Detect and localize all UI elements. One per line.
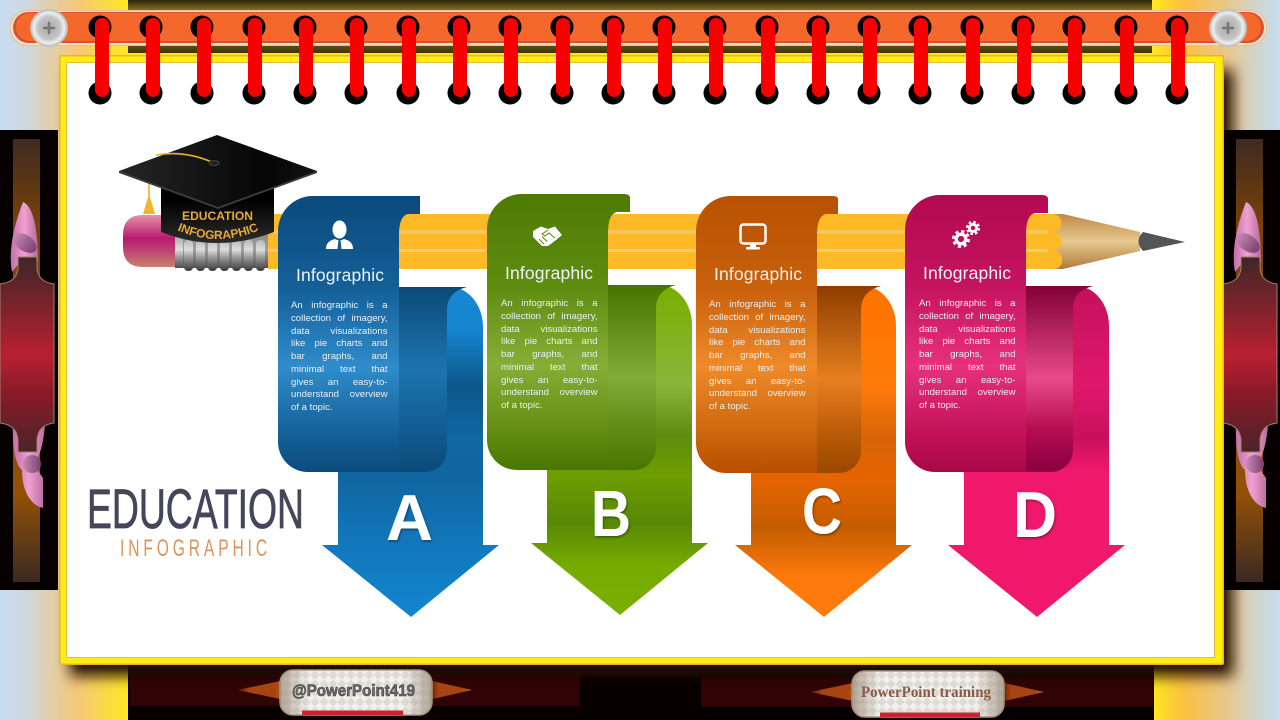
panel shadow [70,70,1233,676]
bottom dark band [128,660,1154,720]
body text B: bar graphs, and [501,349,598,360]
body text C: gives an easy-to- [709,376,806,386]
cap base [161,186,274,243]
subtitle: INFOGRAPHIC: INFOGRAPHIC [120,535,271,562]
body text D: minimal text that [919,362,1016,373]
button: PowerPoint training [810,671,1044,717]
body text D: understand overview [919,387,1016,398]
front panel A [278,196,420,472]
screw right [1209,9,1247,47]
body text C [709,299,806,417]
pencil yellow body [268,214,1062,269]
cap text [178,209,258,239]
body text D: collection of imagery, [919,311,1016,322]
body text B: minimal text that [501,362,598,373]
icon: monitor [740,224,766,250]
body text A: understand overview [291,389,388,400]
body text A: of a topic. [291,402,333,413]
body text B: data visualizations [501,324,598,334]
top orange binder bar [10,10,1266,46]
heading B: Infographic [505,263,593,283]
body text D: data visualizations [919,324,1016,334]
pencil [123,214,1185,271]
body text B: gives an easy-to- [501,374,598,386]
letter D: D [1013,478,1057,551]
notebook page [59,55,1224,665]
pencil eraser [123,215,175,267]
panel: card C orange [696,196,912,617]
body text C: minimal text that [709,363,806,374]
spiral binding rings [88,16,1188,104]
button: @PowerPoint419: @PowerPoint419 [292,681,415,700]
heading A: Infographic [296,265,384,285]
body text B: collection of imagery, [501,311,598,322]
body text C: of a topic. [709,401,751,412]
body text C: data visualizations [709,324,806,336]
arrow D [948,286,1125,617]
body text C: bar graphs, and [709,350,806,361]
body text B: understand overview [501,387,598,398]
body text A: gives an easy-to- [291,376,388,388]
cap board [119,135,317,209]
tassel [143,180,155,214]
button: @PowerPoint419 [237,670,472,715]
panel: card D pink [905,195,1125,617]
body text C: collection of imagery, [709,312,806,323]
body text B [501,298,598,416]
arrow A [322,287,499,617]
icon: gears [954,222,979,246]
arrow C [735,286,912,617]
button: PowerPoint training: PowerPoint training [861,684,991,701]
letter B: B [591,477,631,550]
body text D: like pie charts and [919,336,1016,347]
letter C: C [802,474,842,548]
graduation cap [119,135,317,243]
cap text: EDUCATION [182,209,253,223]
body text A: data visualizations [291,326,388,336]
body text A: collection of imagery, [291,313,388,324]
body text A: An infographic is a [291,300,388,311]
body text D [919,298,1016,416]
pencil metal ferrule [175,232,268,271]
body text C: like pie charts and [709,337,806,348]
panel: card B green [487,194,708,615]
body text C: understand overview [709,388,806,399]
pencil wood tip [1050,214,1140,269]
body text A: bar graphs, and [291,351,388,362]
front panel C [696,196,838,473]
body text A: like pie charts and [291,338,388,349]
front panel D [905,195,1048,472]
panel: card A blue [278,196,499,617]
body text A: minimal text that [291,364,388,375]
arrow B [531,285,708,615]
right side decoration [1223,130,1280,590]
front panel B [487,194,630,470]
letter A: A [386,481,433,554]
body text D: gives an easy-to- [919,374,1016,386]
left side decoration [0,130,58,590]
cap text: INFOGRAPHIC [178,223,258,239]
heading C: Infographic [714,264,802,284]
heading D: Infographic [923,263,1011,283]
body text D: of a topic. [919,400,961,411]
icon: person [326,220,353,249]
top dark band [128,0,1152,53]
body text B: An infographic is a [501,298,598,309]
body text C: An infographic is a [709,299,806,310]
pencil graphite point [1138,232,1185,251]
body text B: like pie charts and [501,336,598,347]
body text B: of a topic. [501,400,543,411]
title: EDUCATION: EDUCATION [87,477,304,540]
icon: handshake [533,226,562,246]
body text D: An infographic is a [919,298,1016,309]
body text A [291,300,388,418]
screw left [30,9,68,47]
body text D: bar graphs, and [919,349,1016,360]
